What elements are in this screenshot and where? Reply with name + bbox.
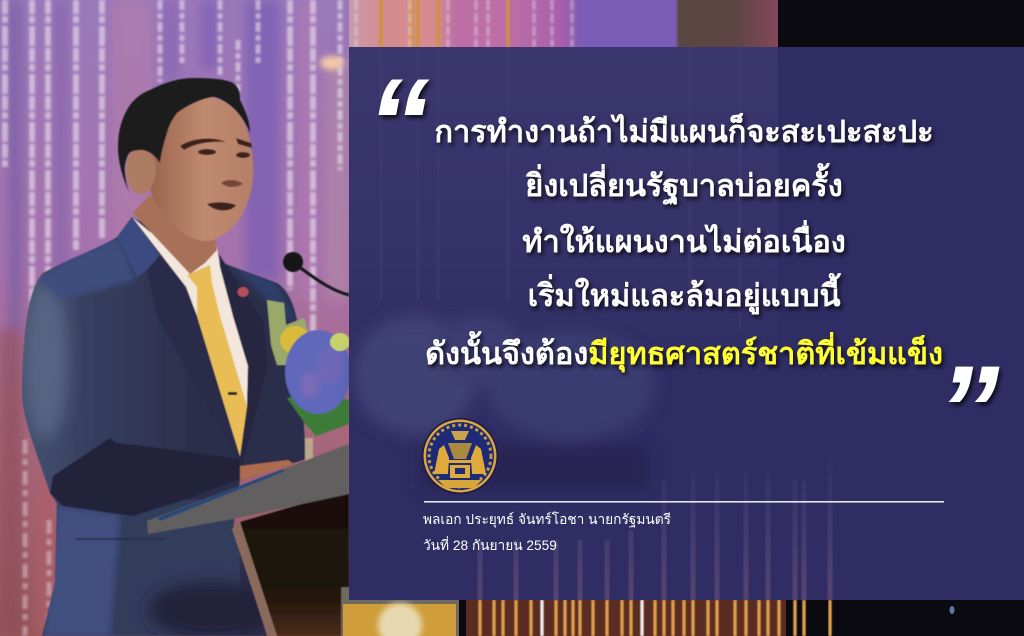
- faint flowers: [353, 315, 655, 490]
- faint stage poles: [480, 455, 830, 600]
- quote text: ทำให้แผนงานไม่ต่อเนื่อง: [522, 220, 846, 259]
- pocket welt: [76, 538, 165, 540]
- shoulder sheen: [40, 238, 136, 300]
- flowers: [267, 300, 351, 462]
- caption: speaker and date: [423, 511, 671, 553]
- quote text: เริ่มใหม่และล้มอยู่แบบนี้: [528, 272, 841, 315]
- divider line: [424, 501, 944, 503]
- lower jacket: [42, 500, 240, 636]
- bottom strip: [466, 600, 786, 636]
- forearm: [50, 438, 240, 516]
- icon: government seal: [422, 418, 498, 494]
- facial features: [180, 138, 252, 210]
- panel: quote background: [349, 47, 1024, 600]
- lectern: [147, 444, 349, 636]
- shirt: [132, 217, 248, 456]
- quote text: การทำงานถ้าไม่มีแผนก็จะสะเปะสะปะ: [434, 112, 934, 149]
- curtain folds: [0, 0, 349, 636]
- microphone: [283, 252, 349, 295]
- ear: [126, 146, 156, 194]
- neck: [133, 195, 217, 274]
- sparkle strands: [5, 0, 340, 636]
- right lapel: [218, 253, 268, 466]
- caption: speaker and date: พลเอก ประยุทธ์ จันทร์โอชา นายกรัฐมนตรี: [423, 511, 671, 528]
- framed picture: [341, 587, 459, 636]
- lapel pin: [238, 287, 248, 297]
- hand: [240, 460, 294, 480]
- top strip: [349, 0, 778, 47]
- photo: speaker at podium: [0, 78, 351, 636]
- quote text: ดังนั้นจึงต้องมียุทธศาสตร์ชาติที่เข้มแข็ง: [425, 330, 943, 373]
- hair: [118, 78, 250, 197]
- opening quotation mark: “: [367, 54, 430, 193]
- quote text: ยิ่งเปลี่ยนรัฐบาลบ่อยครั้ง: [525, 162, 843, 206]
- upper arm highlight: [24, 280, 68, 440]
- left lapel: [117, 217, 240, 458]
- suit jacket: [22, 217, 306, 636]
- quote text: [425, 112, 943, 373]
- body right: [297, 462, 298, 463]
- head: [145, 95, 253, 241]
- closing quotation mark: ”: [937, 341, 1000, 480]
- tie: [187, 265, 247, 456]
- caption: speaker and date: วันที่ 28 กันยายน 2559: [423, 536, 557, 553]
- faint backdrop tint: [349, 47, 778, 377]
